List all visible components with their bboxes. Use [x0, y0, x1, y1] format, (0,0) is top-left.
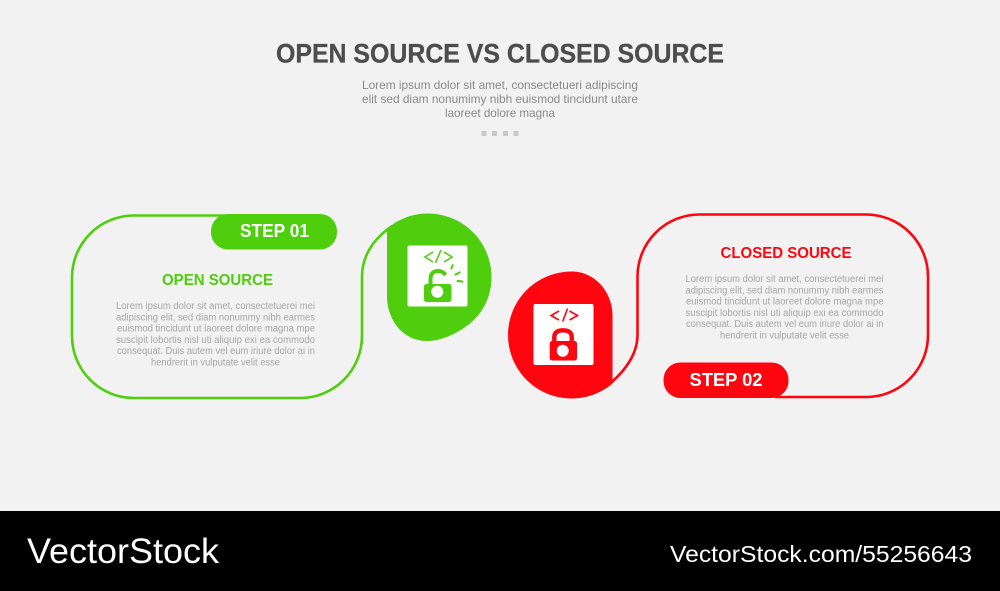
panel: closed source: [606, 214, 928, 398]
vectorstock logo: VectorStock: [27, 532, 220, 571]
open source heading: OPEN SOURCE: [162, 272, 273, 289]
open padlock: [424, 264, 463, 302]
icon: open lock blob: [387, 213, 492, 341]
step 02 badge: STEP 02: [690, 370, 762, 390]
closed source description: [686, 274, 884, 341]
open source description: hendrerit in vulputate velit esse: [151, 357, 281, 368]
closed source heading: CLOSED SOURCE: [720, 245, 852, 262]
step 01 badge: STEP 01: [240, 221, 309, 241]
code brackets: [425, 250, 452, 263]
step 02 badge: [664, 362, 788, 398]
subtitle text: laoreet dolore magna: [445, 106, 555, 120]
closed padlock: [550, 330, 577, 360]
image url: VectorStock.com/55256643: [670, 541, 972, 567]
footer bar: [0, 511, 1000, 591]
pagination dots: [482, 131, 518, 136]
open source description: consequat. Duis autem vel eum iriure dolor ai in: [117, 346, 315, 357]
closed source description: suscipit lobortis nisl uti aliquip exi ea commodo: [686, 308, 884, 319]
red card outline: [606, 214, 928, 397]
subtitle text: [362, 78, 638, 120]
code brackets: [551, 308, 578, 322]
closed source description: consequat. Duis autem vel eum iriure dolor ai in: [686, 319, 884, 330]
open source description: suscipit lobortis nisl uti aliquip exi ea commodo: [116, 335, 316, 346]
subtitle text: Lorem ipsum dolor sit amet, consectetueri adipiscing: [362, 78, 638, 92]
closed source description: hendrerit in vulputate velit esse: [720, 330, 850, 341]
step 01 badge: [211, 214, 337, 250]
open source description: Lorem ipsum dolor sit amet, consectetuerei mei: [116, 301, 315, 312]
closed source description: euismod tincidunt ut laoreet dolore magna mpe: [686, 296, 884, 308]
open source description: [116, 301, 316, 368]
icon: closed lock blob: [508, 272, 612, 398]
title: OPEN SOURCE VS CLOSED SOURCE: [276, 38, 724, 68]
closed source description: Lorem ipsum dolor sit amet, consectetuerei mei: [686, 274, 884, 285]
subtitle text: elit sed diam nonumimy nibh euismod tincidunt utare: [362, 92, 638, 106]
closed source description: adipiscing elit, sed diam nonummy nibh earmes: [686, 285, 884, 296]
panel: open source: [72, 214, 392, 398]
green card outline: [72, 216, 392, 398]
open source description: adipiscing elit, sed diam nonummy nibh earmes: [116, 312, 315, 323]
open source description: euismod tincidunt ut laoreet dolore magna mpe: [117, 324, 316, 334]
